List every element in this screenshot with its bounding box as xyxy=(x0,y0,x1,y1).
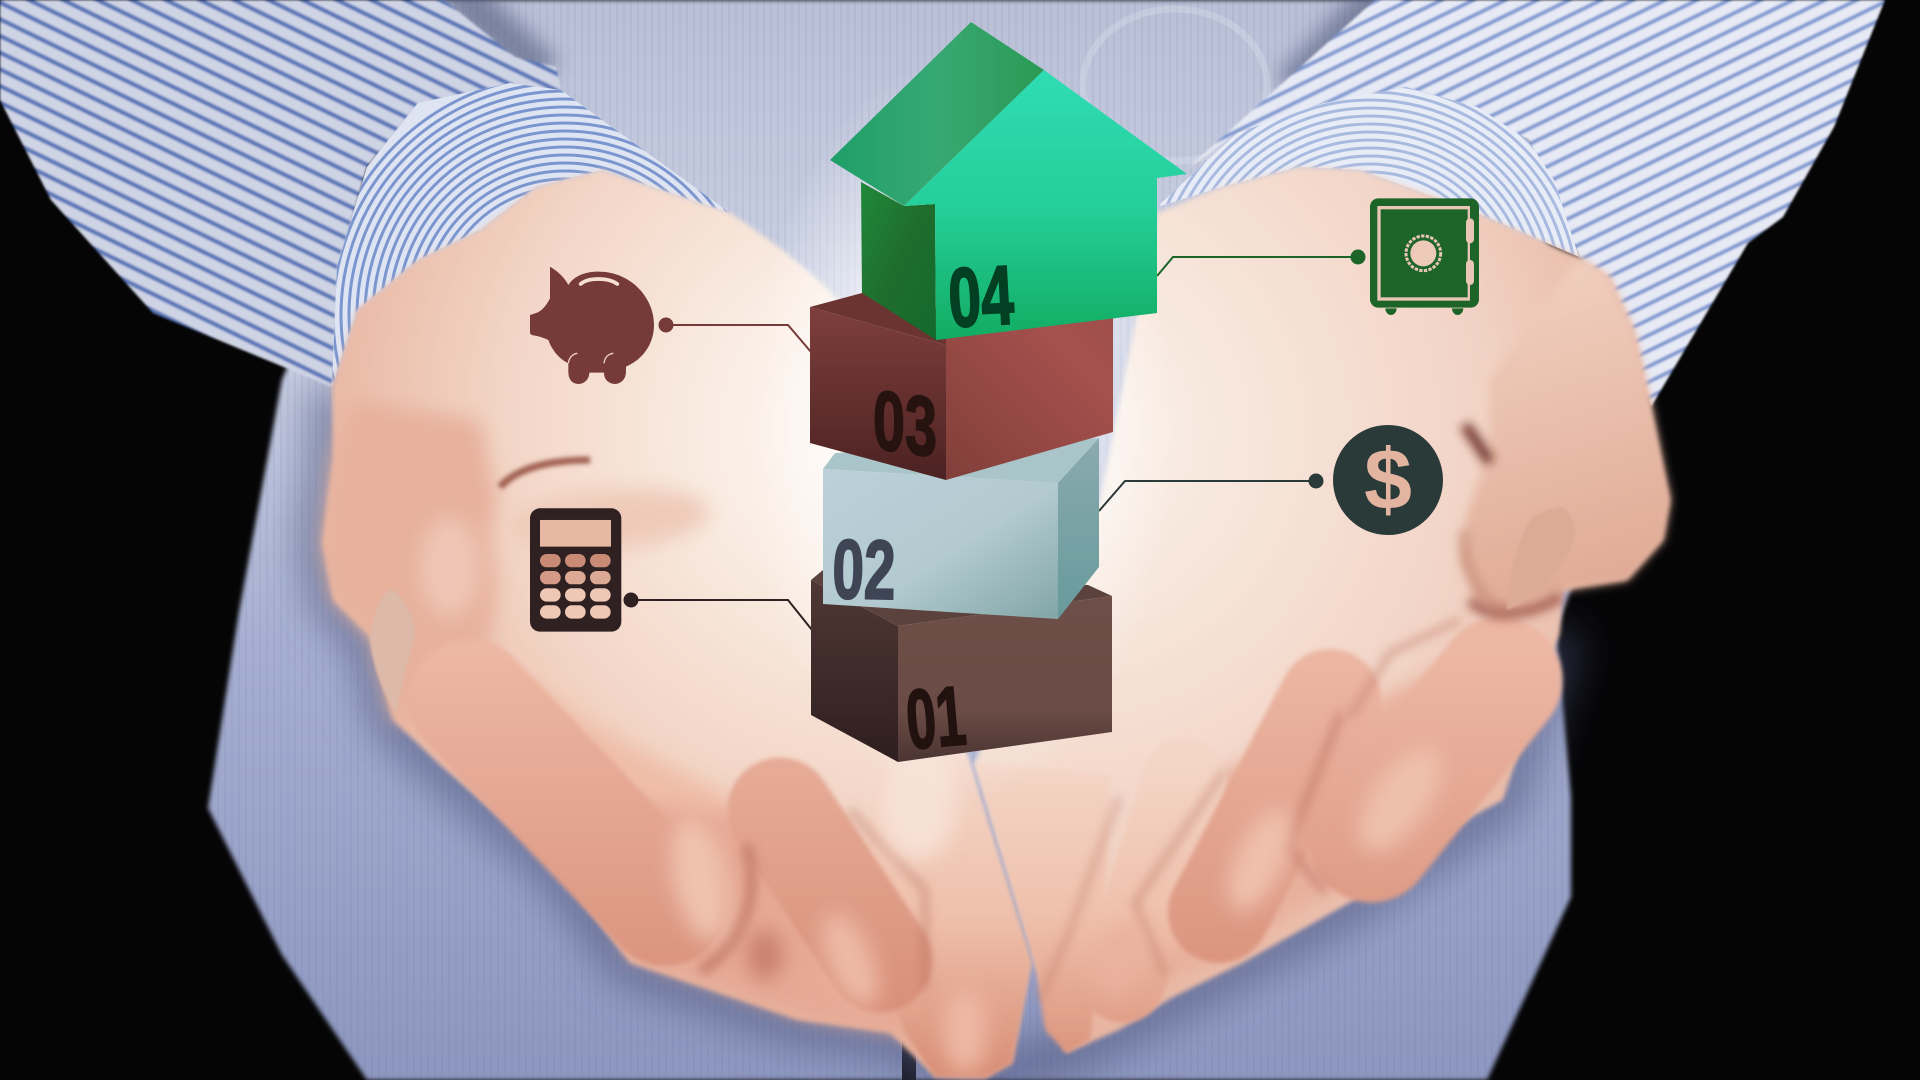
number 04: 04 xyxy=(946,248,1016,345)
connector: safe to house xyxy=(1157,250,1364,276)
block 03 xyxy=(810,293,1113,480)
photo: left sleeve xyxy=(0,0,729,387)
connector: dollar to box 02 xyxy=(1099,474,1322,511)
number 03: 03 xyxy=(873,372,937,475)
icon: dollar coin xyxy=(1333,425,1443,535)
connector: piggy to box 03 xyxy=(660,318,811,352)
photo: right sleeve xyxy=(1158,0,1886,408)
icon: piggy bank xyxy=(530,267,654,384)
left thumb nail xyxy=(370,590,415,712)
icon: safe xyxy=(1370,198,1479,315)
number 01: 01 xyxy=(902,668,969,767)
block 04: house xyxy=(830,22,1187,345)
photo: left hand xyxy=(322,170,1031,1078)
connector: calculator to box 01 xyxy=(624,594,812,630)
block 02 xyxy=(823,438,1099,619)
glow behind the stack xyxy=(745,60,1175,800)
block 01 xyxy=(811,570,1112,767)
photo: right hand xyxy=(974,167,1670,1053)
icon: calculator xyxy=(530,508,621,632)
photo: shirt torso xyxy=(208,0,1640,1080)
right thumb nail xyxy=(1507,507,1575,610)
icon: dollar coin: $ xyxy=(1364,432,1412,528)
number 02: 02 xyxy=(832,522,896,617)
